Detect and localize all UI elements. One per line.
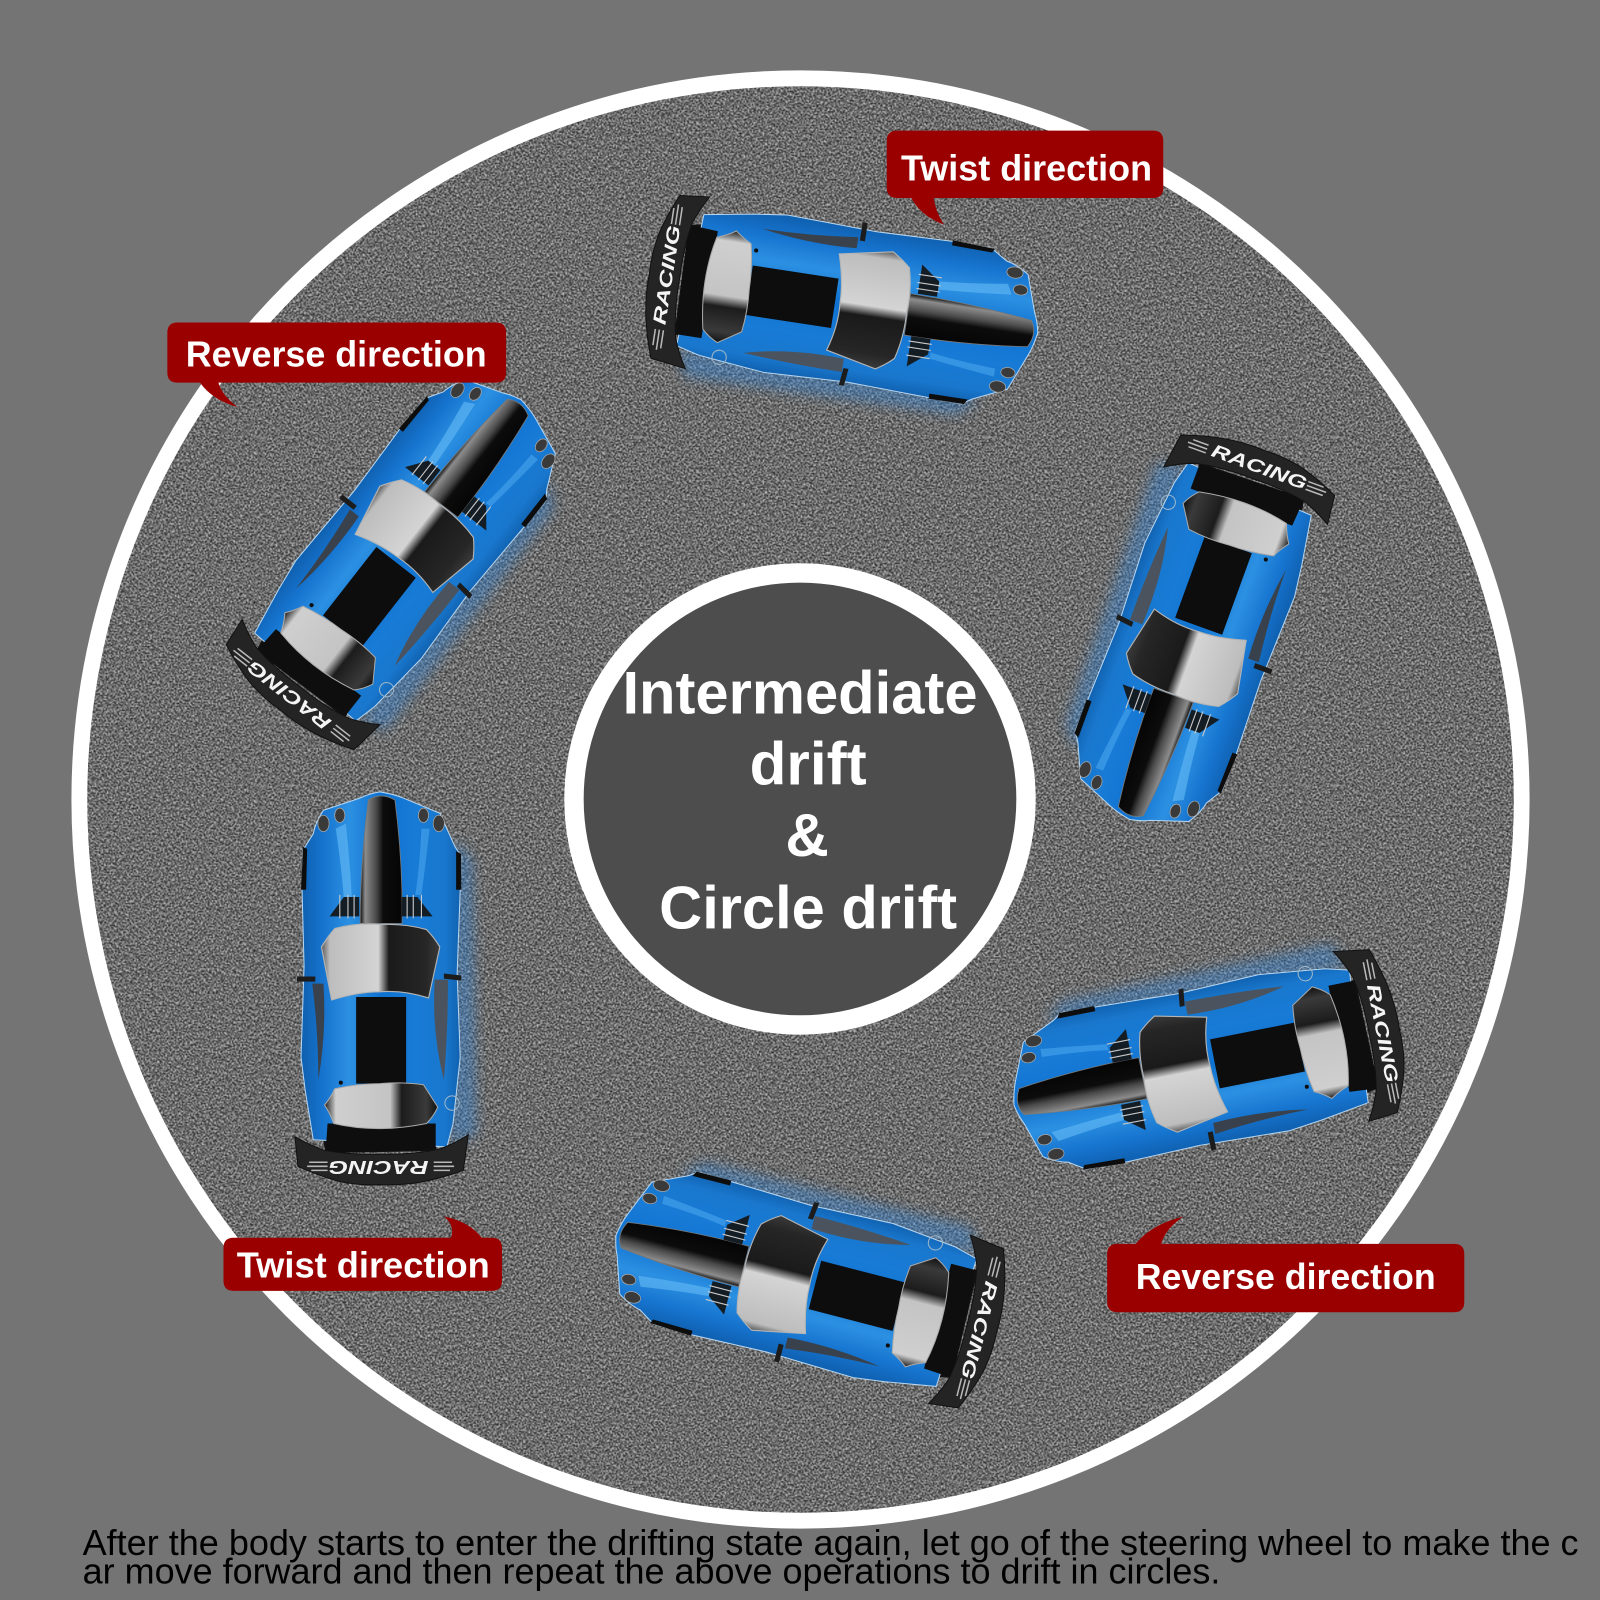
- car 2: right: [1039, 417, 1344, 848]
- centre title: Circle drift: [659, 875, 957, 942]
- car 1: top: RACING: [648, 224, 684, 326]
- car 5: lower left: [295, 792, 477, 1185]
- car 6: upper left: [212, 348, 598, 769]
- car 3: lower right: [995, 934, 1416, 1188]
- callout: reverse direction lower right: [1107, 1216, 1464, 1312]
- centre title: Intermediate: [622, 659, 978, 726]
- caption text: ar move forward and then repeat the above operations to drift in circles.: [83, 1552, 1220, 1592]
- centre badge: [574, 573, 1026, 1025]
- callout: reverse direction upper left: [167, 322, 506, 407]
- car 1: top: [635, 190, 1051, 429]
- callout: twist direction lower left: Twist direction: [237, 1246, 490, 1286]
- car 4: bottom: [595, 1141, 1021, 1416]
- centre title: [622, 659, 978, 942]
- callout: twist direction lower left: [223, 1216, 502, 1291]
- car 3: lower right: RACING: [1363, 982, 1403, 1084]
- caption text: [83, 1523, 1579, 1592]
- car 4: bottom: RACING: [957, 1279, 1002, 1381]
- car 5: lower left: RACING: [329, 1157, 429, 1178]
- caption text: After the body starts to enter the drifting state again, let go of the steering wheel to make the c: [83, 1523, 1579, 1563]
- callout: twist direction top: Twist direction: [901, 149, 1152, 189]
- callout: twist direction top: [887, 131, 1163, 224]
- centre title: drift: [750, 731, 867, 798]
- callout: reverse direction upper left: Reverse direction: [186, 334, 487, 374]
- centre title: &: [785, 802, 829, 869]
- callout: reverse direction lower right: Reverse direction: [1136, 1257, 1436, 1297]
- car 2: right: RACING: [1209, 440, 1310, 494]
- car 6: upper left: RACING: [243, 656, 335, 734]
